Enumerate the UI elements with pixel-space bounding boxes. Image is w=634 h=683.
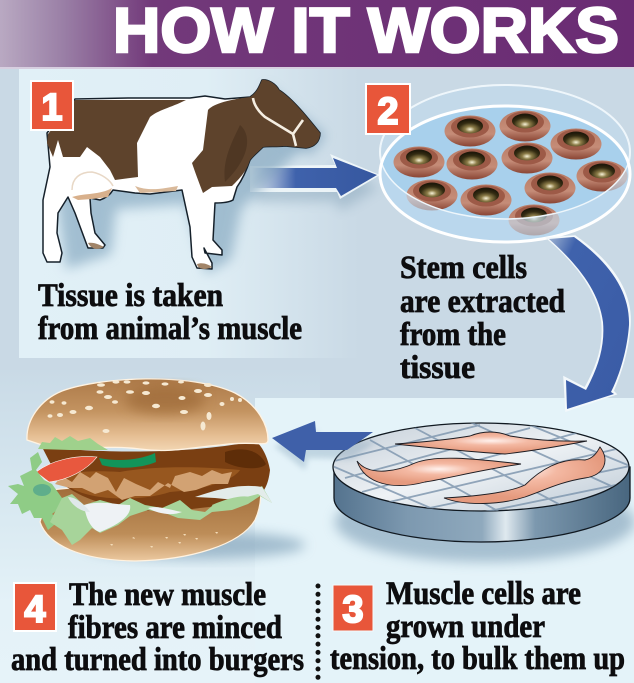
panel: lower left background <box>0 370 320 683</box>
lettuce: top fringe <box>38 436 108 450</box>
stem cell <box>500 110 550 142</box>
caption: step 2: are extracted <box>400 284 565 320</box>
sesame seeds <box>48 380 242 433</box>
arrow: plate to burger <box>272 421 377 470</box>
number badge 4: 4 <box>24 589 46 631</box>
muscle fibre <box>395 432 587 454</box>
caption: step 2 <box>400 250 565 386</box>
caption: step 1: from animal’s muscle <box>38 311 302 347</box>
stem cell <box>444 116 496 146</box>
caption: step 2: Stem cells <box>400 250 527 286</box>
patty <box>42 441 270 511</box>
stem cell <box>508 204 560 236</box>
caption: step 3: Muscle cells are <box>386 576 581 612</box>
number badge 2 <box>366 84 410 134</box>
curved arrow: stem cells to muscle cells <box>547 236 630 411</box>
caption: step 2: from the <box>400 317 506 353</box>
bottom bun <box>40 470 261 561</box>
icon: petri dish with stem cells <box>380 85 630 242</box>
lettuce: left frill <box>8 452 70 530</box>
top bun <box>27 379 268 450</box>
number badge 3 <box>333 585 373 631</box>
stem cell <box>576 160 628 192</box>
number badge 2: 2 <box>377 91 399 133</box>
icon: petri plate with muscle fibres <box>330 422 634 562</box>
number badge 4 <box>14 583 56 631</box>
number badge 1 <box>31 81 73 130</box>
muscle fibre <box>357 458 521 486</box>
caption: step 4: fibres are minced <box>68 610 282 646</box>
caption: step 3: grown under <box>386 609 545 645</box>
stem cell <box>550 128 602 160</box>
panel: step 1 background <box>19 69 359 358</box>
caption: step 2: tissue <box>400 350 475 386</box>
caption: step 1 <box>38 278 302 347</box>
panel: lower right background <box>255 398 634 683</box>
tomato <box>36 457 97 482</box>
number badge 1: 1 <box>41 87 63 129</box>
title banner <box>0 0 634 69</box>
gherkin <box>99 453 156 468</box>
number badge 3: 3 <box>342 589 364 631</box>
caption: step 4: and turned into burgers <box>11 642 304 678</box>
lettuce: lower shreds <box>50 486 272 545</box>
icon: burger <box>8 379 305 561</box>
caption: step 4: The new muscle <box>69 577 266 613</box>
stem cell <box>502 142 552 174</box>
stem cell <box>446 148 498 180</box>
stem cell <box>406 180 458 210</box>
muscle fibre <box>444 447 605 504</box>
stem cell <box>460 184 512 216</box>
stem cell <box>394 146 444 178</box>
icon: cow <box>43 80 326 274</box>
caption: step 4 <box>11 577 304 678</box>
caption: step 3 <box>330 576 625 677</box>
caption: step 1: Tissue is taken <box>38 278 223 314</box>
stem cell <box>524 172 576 204</box>
arrow: cow to stem cells <box>250 154 380 211</box>
